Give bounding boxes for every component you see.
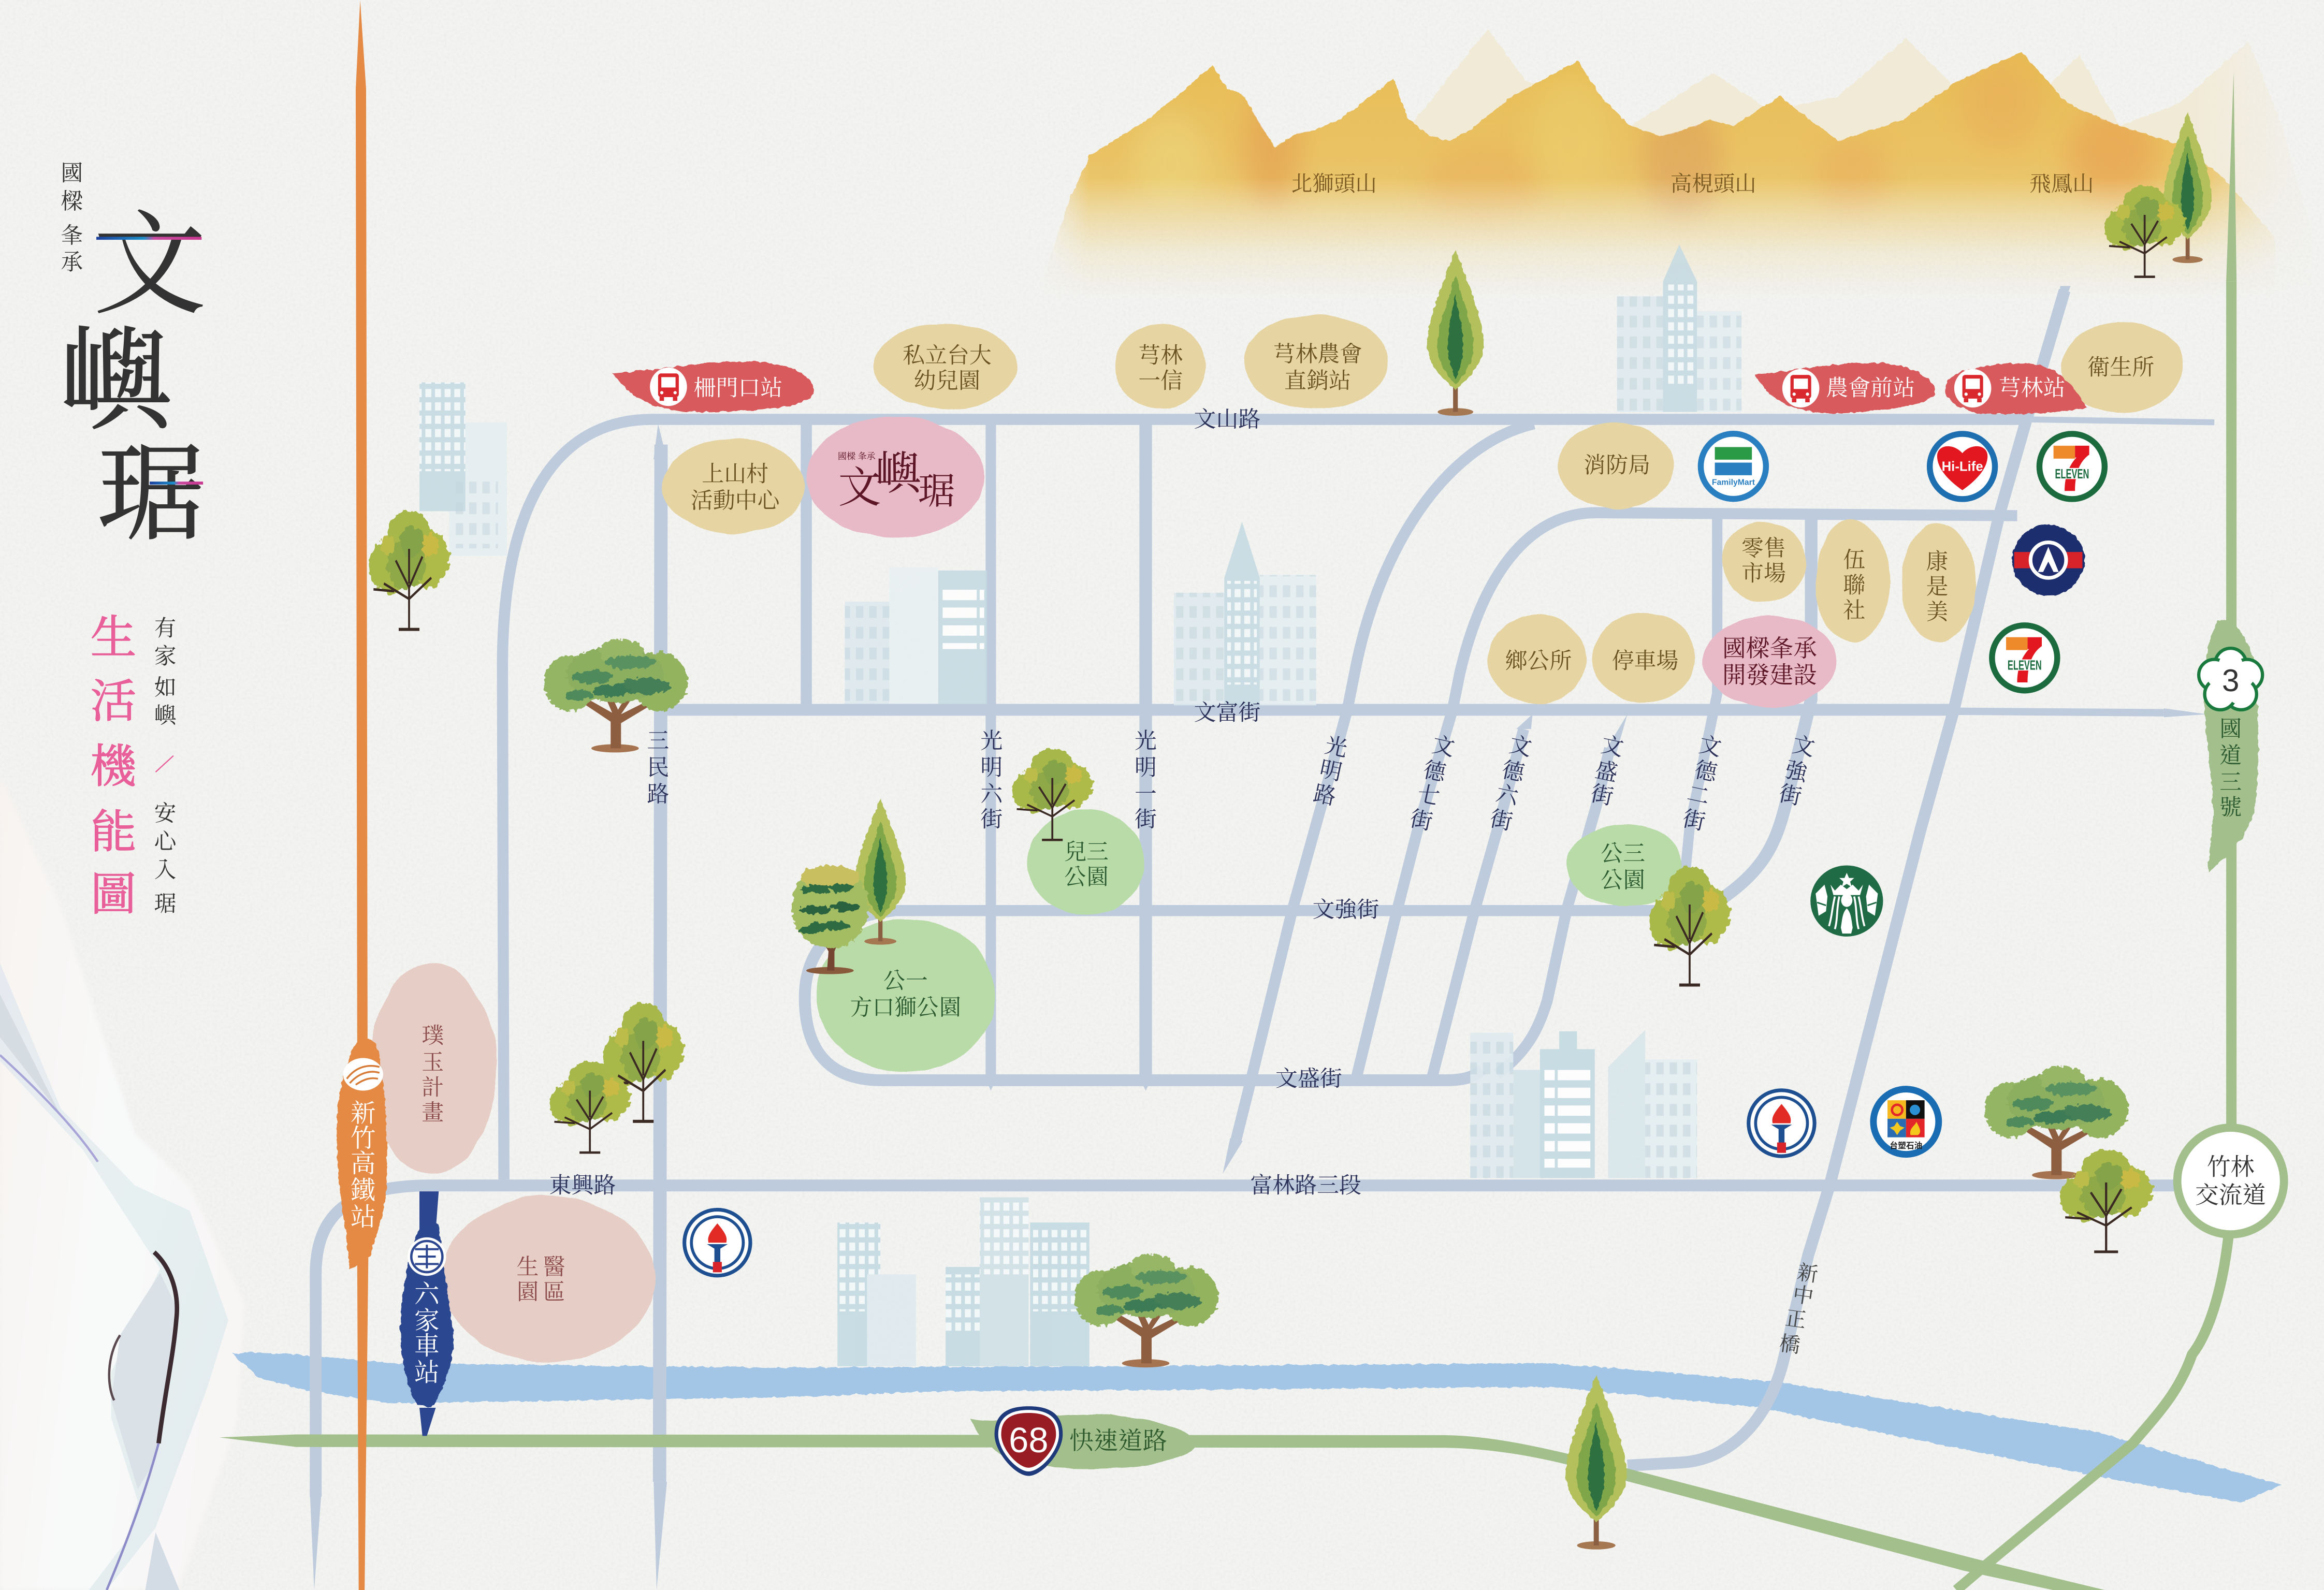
landmark blob: 生醫園區: 園區 <box>516 1280 565 1305</box>
label blob: 私立台大幼兒園: 幼兒園 <box>914 369 980 393</box>
road label: 文強街 vertical: 文強街 <box>1777 733 1817 810</box>
park: 兒三公園: 兒三 <box>1064 840 1109 865</box>
river <box>231 1353 2281 1503</box>
logo: 7-Eleven north <box>2039 434 2104 499</box>
interchange: 竹林交流道: 交流道 <box>2195 1182 2266 1208</box>
label blob: 康是美: 康是美 <box>1926 549 1948 624</box>
label blob: 停車場 <box>1592 614 1695 703</box>
bus stop: 芎林站: 芎林站 <box>1999 376 2066 401</box>
label blob: 衛生所: 衛生所 <box>2087 356 2154 380</box>
road label: 光明一街: 光明一街 <box>1135 729 1157 832</box>
logo character: 嶼: 嶼 <box>59 319 172 444</box>
expressway 68 marker: 快速道路 <box>1069 1428 1167 1455</box>
tree: round centre <box>1650 866 1730 987</box>
logo character: 琚: 琚 <box>98 435 205 554</box>
Taiwan rail line stub top <box>419 1191 439 1436</box>
park: 兒三公園 <box>1028 809 1144 916</box>
building cluster: north <box>1617 244 1741 412</box>
interchange: 竹林交流道 <box>2177 1128 2284 1234</box>
label blob: 康是美 <box>1901 523 1976 641</box>
label blob: 上山村活動中心: 上山村 <box>702 462 768 487</box>
label blob: 芎林一信: 一信 <box>1138 369 1183 393</box>
mountain name: 北獅頭山: 北獅頭山 <box>1291 172 1377 196</box>
park: 公三公園 <box>1566 824 1682 907</box>
building cluster: left <box>419 382 507 556</box>
freeway shield icon <box>2199 648 2262 710</box>
label blob: 零售市場: 零售 <box>1741 536 1786 561</box>
road label: 光明六街: 光明六街 <box>980 729 1003 832</box>
freeway 3 marker: 國道三號 <box>2219 717 2242 820</box>
label blob: 私立台大幼兒園 <box>875 323 1017 409</box>
mountain name: 飛鳳山: 飛鳳山 <box>2029 172 2094 196</box>
road label: 文德六街: 文德六街 <box>1488 733 1534 835</box>
label blob: 芎林一信 <box>1114 323 1207 409</box>
label blob: 國樑夆承開發建設 <box>1703 615 1836 707</box>
logo: Hi-Life: Hi-Life <box>1942 460 1983 474</box>
site marker: 文嶼琚 pink blob: 國樑 夆承 <box>838 451 876 461</box>
decorative crystal ribbon <box>0 777 244 1590</box>
interchange: 竹林交流道: 竹林 <box>2207 1154 2255 1180</box>
label blob: 消防局: 消防局 <box>1584 454 1650 478</box>
route shield 68: 68 <box>1009 1420 1049 1460</box>
logo: 7-Eleven north: ELEVEN <box>2055 467 2089 482</box>
road label: 光明路: 光明路 <box>1311 733 1349 810</box>
tagline: 安心入琚: 安心入琚 <box>154 801 178 916</box>
label blob: 國樑夆承開發建設: 國樑夆承 <box>1722 635 1817 662</box>
tree: round north east <box>2104 185 2185 278</box>
tree: round south west back <box>603 1002 683 1123</box>
label blob: 鄉公所 <box>1488 615 1586 704</box>
label blob: 上山村活動中心: 活動中心 <box>691 489 781 514</box>
logo: CPC gas station west <box>682 1208 752 1277</box>
bus stop: 農會前站: 農會前站 <box>1826 376 1915 401</box>
logo: 7-Eleven south: ELEVEN <box>2008 659 2042 673</box>
tagline slash <box>156 756 173 772</box>
logo: Formosa gas station <box>1873 1089 1939 1155</box>
tree: bushy park <box>791 865 868 974</box>
tree: broad west <box>544 639 688 752</box>
logo colour stroke 2 <box>150 482 203 485</box>
label blob: 私立台大幼兒園: 私立台大 <box>903 344 992 368</box>
label blob: 零售市場 <box>1722 521 1805 602</box>
logo: 7-Eleven south <box>1992 625 2057 691</box>
heading: 生活機能圖: 生活機能圖 <box>91 613 137 920</box>
logo: Formosa gas station: 台塑石油 <box>1890 1141 1922 1150</box>
station: 六家車站 <box>400 1224 454 1408</box>
freeway 3 marker <box>2199 620 2262 873</box>
bus stop: 柵門口站 <box>612 361 814 412</box>
road label: 文德七街: 文德七街 <box>1407 733 1457 835</box>
label blob: 芎林一信: 芎林 <box>1138 344 1183 368</box>
label blob: 伍聯社 <box>1815 520 1890 641</box>
park: 公一方口獅公園: 方口獅公園 <box>850 996 961 1020</box>
station: 新竹高鐵站: 新竹高鐵站 <box>351 1100 376 1231</box>
park: 公三公園: 公三 <box>1601 841 1645 866</box>
label blob: 停車場: 停車場 <box>1612 649 1678 674</box>
building cluster: south west 2 <box>946 1198 1090 1366</box>
small brand: 國樑夆承: 國樑夆承 <box>61 162 83 275</box>
label blob: 芎林農會直銷站 <box>1243 314 1389 409</box>
site marker: 文嶼琚 pink blob <box>806 416 984 538</box>
park: 公一方口獅公園 <box>817 918 995 1073</box>
logo: A.mart <box>2012 524 2085 596</box>
site marker: 文嶼琚 pink blob: 嶼 <box>875 448 921 499</box>
mountains: watercolour ridge <box>1038 30 2312 296</box>
label blob: 芎林農會直銷站: 芎林農會 <box>1273 342 1362 367</box>
logo: Starbucks <box>1810 865 1883 937</box>
label blob: 上山村活動中心 <box>662 439 805 533</box>
label blob: 伍聯社: 伍聯社 <box>1843 548 1866 623</box>
park: 公一方口獅公園: 公一 <box>883 969 928 994</box>
logo colour stroke 1 <box>96 237 201 240</box>
tree: cypress mountain <box>2163 111 2212 263</box>
green expressway 68 line <box>220 1434 2104 1590</box>
tree: cypress south <box>1566 1374 1626 1550</box>
label blob: 零售市場: 市場 <box>1741 562 1786 586</box>
road label: 文富街: 文富街 <box>1194 701 1260 725</box>
mountain name: 高梘頭山: 高梘頭山 <box>1671 172 1756 196</box>
tree: cypress north <box>1427 249 1484 416</box>
station: 六家車站: 六家車站 <box>414 1280 440 1387</box>
building cluster: south east <box>1470 1030 1697 1178</box>
building cluster: south west 1 <box>837 1222 916 1366</box>
tree: broad south east <box>1985 1066 2128 1179</box>
logo: Hi-Life <box>1930 434 1995 499</box>
road label: 文盛街 vertical: 文盛街 <box>1589 733 1625 810</box>
tree: round near interchange <box>2060 1149 2152 1253</box>
brand title block <box>59 162 206 554</box>
park: 兒三公園: 公園 <box>1064 865 1109 890</box>
label blob: 芎林農會直銷站: 直銷站 <box>1284 369 1351 393</box>
tree: round west <box>369 510 449 631</box>
station: 新竹高鐵站 <box>337 1039 387 1270</box>
tagline: 有家如嶼: 有家如嶼 <box>154 617 177 728</box>
road tapers <box>310 286 2207 1590</box>
road label: 文盛街: 文盛街 <box>1275 1067 1342 1091</box>
road label: 文山路: 文山路 <box>1194 407 1260 432</box>
building cluster: centre <box>1174 521 1316 705</box>
bus stop: 芎林站 <box>1944 363 2087 414</box>
site marker: 文嶼琚 pink blob: 琚 <box>918 471 955 512</box>
road label: 文強街: 文強街 <box>1313 898 1379 923</box>
road label: 文德二街: 文德二街 <box>1680 733 1723 835</box>
green freeway line <box>1956 282 2231 1590</box>
label blob: 衛生所 <box>2061 322 2183 414</box>
freeway shield icon: 3 <box>2222 663 2239 698</box>
road network <box>316 290 2214 1497</box>
expressway 68 marker <box>969 1406 1198 1476</box>
landmark blob: 璞玉計畫: 璞玉計畫 <box>422 1024 444 1126</box>
landmark blob: 生醫園區 <box>442 1196 655 1362</box>
logo: CPC gas station centre <box>1747 1088 1817 1158</box>
site marker: 文嶼琚 pink blob: 文 <box>838 464 881 512</box>
route shield 68 <box>995 1406 1063 1476</box>
high-speed rail line <box>356 0 368 1590</box>
logo: FamilyMart: FamilyMart <box>1712 478 1755 487</box>
logo: FamilyMart <box>1701 434 1766 499</box>
label blob: 消防局 <box>1558 422 1673 508</box>
bus stop: 柵門口站: 柵門口站 <box>694 376 782 401</box>
building cluster: near site <box>845 567 987 704</box>
road label: 富林路三段: 富林路三段 <box>1250 1173 1361 1198</box>
landmark blob: 生醫園區: 生醫 <box>516 1255 565 1279</box>
label blob: 國樑夆承開發建設: 開發建設 <box>1722 662 1817 688</box>
tree: round south west front <box>550 1061 630 1154</box>
road label: 三民路: 三民路 <box>647 729 669 807</box>
label blob: 鄉公所: 鄉公所 <box>1505 649 1572 674</box>
bus stop: 農會前站 <box>1755 363 1936 414</box>
tree: broad south <box>1074 1253 1218 1367</box>
landmark blob: 璞玉計畫 <box>369 963 497 1174</box>
logo character: 文: 文 <box>93 204 206 329</box>
park: 公三公園: 公園 <box>1601 868 1645 893</box>
tree: round park <box>1012 748 1092 841</box>
road label: 新中正橋: 新中正橋 <box>1778 1260 1820 1358</box>
tree: cypress park <box>855 798 906 945</box>
road label: 東興路: 東興路 <box>549 1174 616 1198</box>
